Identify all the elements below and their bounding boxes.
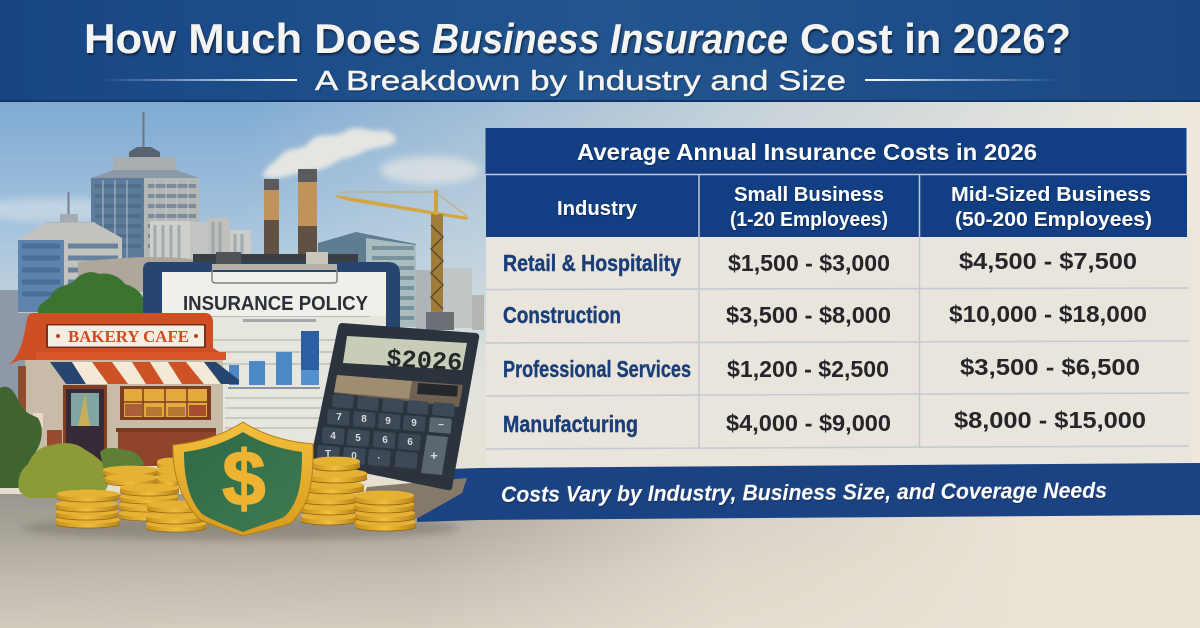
table title bar: [486, 128, 1186, 174]
brick base: [118, 428, 216, 466]
shop door: [63, 385, 107, 463]
calculator keypad: 4: [330, 431, 336, 442]
main title: How Much Does: [84, 15, 421, 62]
calculator keypad: +: [430, 448, 438, 463]
row: construction: [503, 301, 1147, 328]
main title: Business Insurance: [432, 15, 788, 62]
calculator keypad: 9: [411, 418, 417, 429]
tall office tower: [91, 112, 199, 263]
right glass building: [318, 232, 416, 327]
row: professional services: $1,200 - $2,500: [727, 356, 889, 382]
tree: [38, 272, 145, 320]
clipboard clip: [193, 252, 358, 283]
shop wall: [25, 358, 223, 466]
table column headers: (50-200 Employees): [955, 209, 1152, 231]
calculator keypad: 6: [382, 435, 388, 446]
calculator keypad: ·: [377, 453, 381, 464]
shield with dollar sign: [173, 422, 313, 536]
tower crane: [336, 190, 468, 330]
main title: [84, 15, 1071, 62]
smokestacks: [264, 169, 317, 256]
row: professional services: [503, 354, 1140, 382]
table panel: [486, 128, 1192, 470]
distant skyline: [0, 268, 484, 420]
table title bar: Average Annual Insurance Costs in 2026: [577, 139, 1037, 165]
mid-rise buildings: [78, 218, 251, 292]
row: retail and hospitality: [503, 248, 1137, 276]
calculator keypad: 7: [336, 412, 342, 423]
calculator display: $2026: [386, 345, 463, 378]
table column headers: Small Business: [734, 184, 884, 206]
footer ribbon: Costs Vary by Industry, Business Size, and Coverage Needs: [501, 478, 1107, 507]
row: manufacturing: [503, 407, 1146, 437]
row: professional services: Professional Services: [503, 356, 691, 382]
table column headers: (1-20 Employees): [730, 209, 888, 231]
table column headers: Industry: [557, 198, 638, 220]
shield with dollar sign: $: [222, 434, 266, 522]
row: retail and hospitality: $4,500 - $7,500: [959, 248, 1137, 274]
row: manufacturing: $8,000 - $15,000: [954, 407, 1146, 433]
calculator keypad: 0: [351, 451, 357, 462]
calculator keypad: 5: [355, 433, 361, 444]
row: manufacturing: Manufacturing: [503, 411, 638, 437]
shop roof and sign board: [5, 313, 226, 366]
calculator keypad: −: [438, 420, 444, 431]
clipboard with policy: [143, 252, 400, 442]
striped awning: [50, 362, 239, 384]
table column headers: [486, 175, 1187, 237]
calculator keypad: T: [325, 449, 331, 460]
policy heading: INSURANCE POLICY: [183, 293, 369, 315]
calculator keypad: 9: [385, 416, 391, 427]
bushes: [0, 387, 144, 498]
calculator keypad: 6: [407, 437, 413, 448]
shop window: [120, 386, 211, 420]
bakery storefront: [5, 313, 239, 466]
shop sign: BAKERY CAFE: [68, 327, 189, 346]
subtitle: A Breakdown by Industry and Size: [315, 65, 846, 96]
header band: [0, 0, 1200, 102]
row: retail and hospitality: $1,500 - $3,000: [728, 250, 890, 276]
row: construction: $3,500 - $8,000: [726, 302, 891, 328]
footer ribbon: [417, 463, 1200, 522]
calculator keypad: 8: [361, 414, 367, 425]
coin stacks: [56, 457, 416, 532]
table column headers: Mid-Sized Business: [951, 184, 1151, 206]
left office building: [18, 192, 122, 313]
row: construction: Construction: [503, 302, 621, 328]
row: retail and hospitality: Retail & Hospitality: [503, 250, 681, 276]
row: manufacturing: $4,000 - $9,000: [726, 410, 891, 436]
calculator: [311, 323, 479, 518]
row: construction: $10,000 - $18,000: [949, 301, 1147, 327]
main title: Cost in 2026?: [800, 15, 1071, 62]
smoke: [262, 128, 396, 178]
calculator keypad: [317, 394, 455, 475]
bar chart on policy: [228, 331, 320, 389]
row: professional services: $3,500 - $6,500: [960, 354, 1140, 380]
